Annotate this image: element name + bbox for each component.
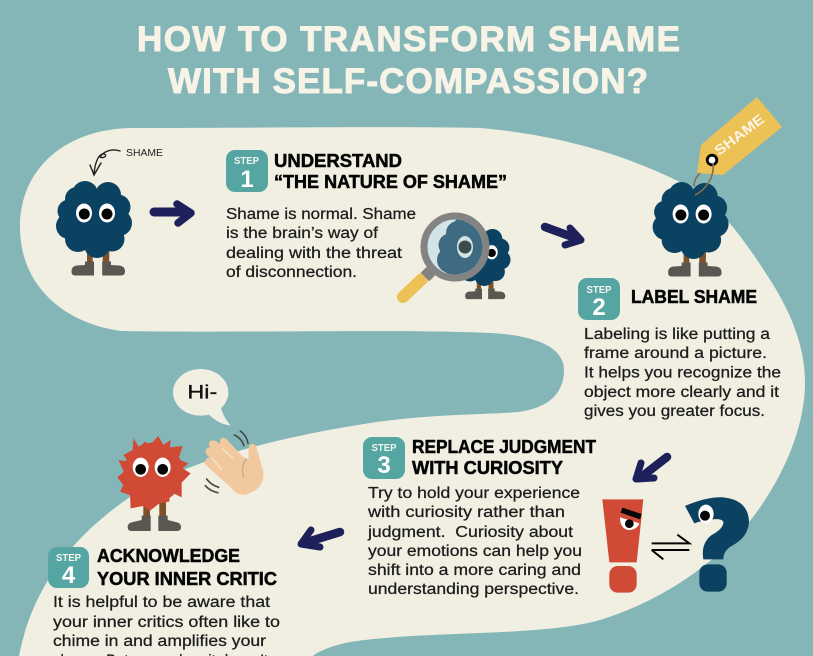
text: step 2 body: object more clearly and it (584, 384, 780, 401)
heading: step 3 (412, 437, 596, 478)
text: step 1 body: is the brain’s way of (226, 225, 379, 242)
text: step 2 body (584, 326, 781, 420)
panel: shame character intro (56, 147, 163, 276)
title: HOW TO TRANSFORM SHAME (137, 20, 680, 59)
panel: tagged character (653, 97, 782, 276)
text: step 2 body: It helps you recognize the (584, 364, 781, 382)
icon: exclamation mark (602, 499, 643, 593)
text: step 2 body: gives you greater focus. (584, 403, 765, 420)
badge: step 4: 4 (62, 562, 76, 589)
text: step 4 body: your inner critics often like to (53, 614, 280, 631)
text: step 3 body: shift into a more caring and (368, 562, 581, 579)
panel: step 4 (48, 546, 280, 656)
heading: step 3: WITH CURIOSITY (412, 458, 563, 478)
badge: step 4: STEP (56, 553, 81, 564)
panel: step 2 (578, 278, 781, 420)
heading: step 2: LABEL SHAME (631, 287, 757, 307)
badge: step 3: 3 (377, 452, 391, 479)
arrow: to step 3 (636, 457, 667, 479)
illustration: inner critic waving (117, 369, 263, 531)
badge: step 1: STEP (234, 156, 259, 167)
arrow: to step 2 (545, 227, 581, 245)
icon: question mark (685, 497, 749, 592)
text: step 4 body: chime in and amplifies your (53, 633, 266, 650)
illustration: magnifying glass over character (403, 215, 513, 299)
speech bubble: Hi- (187, 382, 217, 403)
background ribbon path (19, 127, 805, 656)
text: step 1 body (226, 206, 416, 281)
title (137, 20, 680, 101)
badge: step 4 (48, 547, 89, 589)
heading: step 1: “THE NATURE OF SHAME” (274, 172, 507, 192)
panel: step 1 (226, 150, 507, 281)
icon: curly arrow (90, 150, 120, 175)
text: step 2 body: Labeling is like putting a (584, 326, 770, 343)
text: step 3 body (367, 485, 582, 598)
badge: step 1: 1 (240, 166, 254, 193)
text: step 3 body: understanding perspective. (368, 581, 579, 598)
text: step 1 body: of disconnection. (226, 264, 357, 281)
heading: step 1: UNDERSTAND (274, 151, 402, 171)
character: labeled blob (653, 182, 729, 276)
badge: step 3: STEP (372, 443, 397, 454)
icon: shame tag (697, 97, 782, 175)
arrow: to step 1 (154, 204, 191, 223)
text: step 3 body: judgment. Curiosity about (367, 524, 574, 541)
badge: step 2: STEP (586, 285, 612, 296)
text: step 3 body: with curiosity rather than (367, 504, 565, 521)
badge: step 2: 2 (592, 294, 606, 321)
character: shame blob (56, 181, 132, 276)
heading: step 3: REPLACE JUDGMENT (412, 437, 596, 457)
arrow: to step 4 (301, 530, 340, 547)
badge: step 2 (578, 278, 620, 321)
heading: step 1 (274, 151, 507, 192)
speech bubble (173, 369, 231, 426)
icon: exchange arrows (652, 535, 689, 559)
heading: step 4 (97, 546, 277, 589)
badge: step 1 (226, 150, 268, 193)
text: step 2 body: frame around a picture. (584, 345, 767, 362)
text: step 4 body (53, 594, 280, 656)
badge: step 3 (363, 437, 405, 479)
text: step 3 body: Try to hold your experience (368, 485, 580, 502)
heading: step 4: YOUR INNER CRITIC (97, 569, 277, 589)
text: step 1 body: dealing with the threat (226, 245, 403, 262)
heading: step 4: ACKNOWLEDGE (97, 546, 240, 566)
tag string (694, 163, 713, 195)
panel: step 3 (363, 437, 596, 598)
text: step 1 body: Shame is normal. Shame (226, 206, 416, 223)
text: step 3 body: your emotions can help you (368, 543, 582, 560)
character: red spiky critic (117, 436, 191, 531)
handwritten shame label: SHAME (126, 147, 163, 159)
icon: shame tag: SHAME (711, 111, 767, 158)
icon: waving hand (205, 431, 263, 495)
text: step 4 body: It is helpful to be aware that (53, 594, 271, 611)
illustration: exclamation and question marks (602, 497, 749, 593)
title: WITH SELF-COMPASSION? (168, 62, 648, 101)
